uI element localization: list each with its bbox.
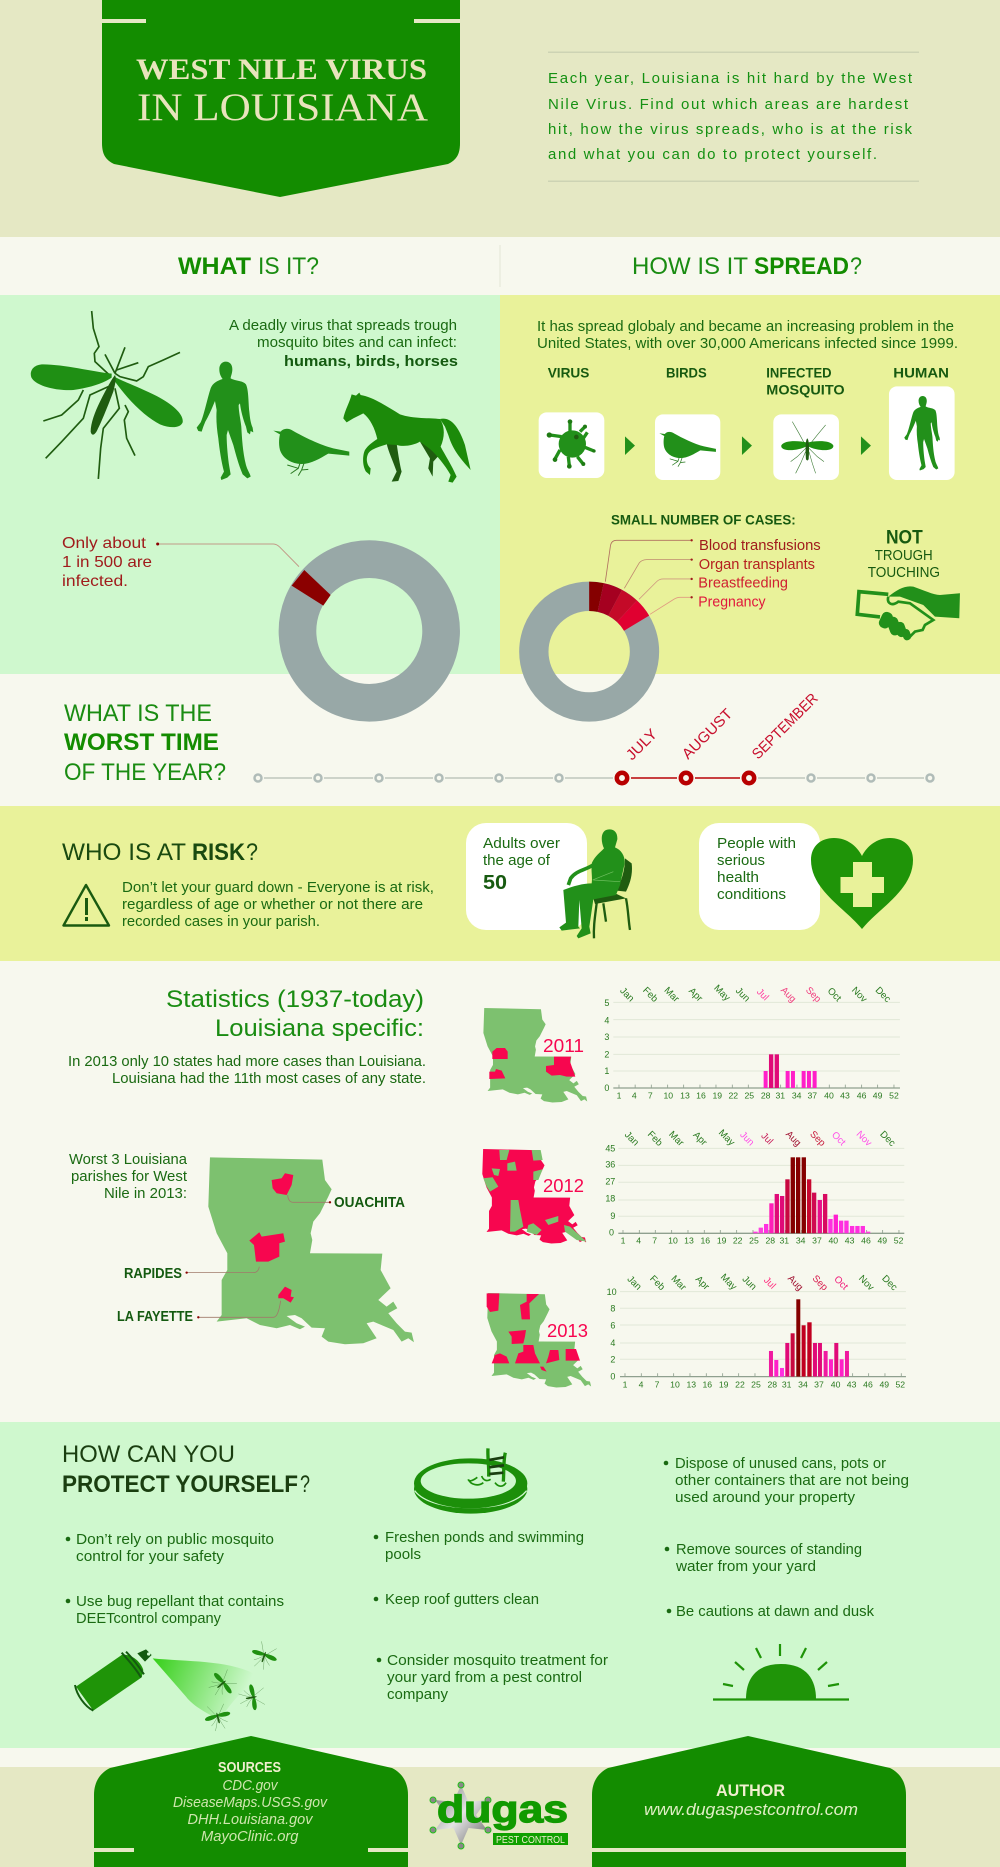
- arrow: [861, 436, 871, 455]
- statistics text: Louisiana had the 11th most cases of any state.: [112, 1070, 426, 1087]
- title: WEST NILE VIRUS: [136, 53, 427, 86]
- bar chart: 2012: 40: [828, 1235, 838, 1245]
- title banner: [102, 0, 460, 197]
- sources banner: CDC.gov: [222, 1777, 279, 1794]
- panel: how is it spread: [500, 295, 1000, 707]
- tips: column 2: [374, 1529, 608, 1703]
- tips: column 3: water from your yard: [675, 1558, 816, 1575]
- bar chart: 2011: 22: [728, 1091, 738, 1101]
- bar chart: 2012: 0: [609, 1227, 614, 1237]
- parish labels: OUACHITA: [334, 1194, 405, 1211]
- heading: worst time: [64, 700, 226, 786]
- tips: column 2: pools: [385, 1546, 421, 1563]
- bar chart: 2011: Mar: [662, 985, 682, 1005]
- panel: header: [0, 0, 1000, 237]
- bar chart: 2012: 36: [605, 1160, 615, 1170]
- arrow: [742, 436, 752, 455]
- author banner: www.dugaspestcontrol.com: [644, 1800, 858, 1819]
- bar chart: 2013: 1: [623, 1380, 628, 1390]
- map: 2011: 2011: [543, 1036, 584, 1056]
- parish labels: LA FAYETTE: [117, 1308, 193, 1325]
- bar chart: 2011: Sep: [803, 985, 823, 1005]
- legend: transmission cases: [698, 537, 821, 611]
- step labels: [548, 365, 949, 398]
- sources banner: [94, 1736, 408, 1867]
- legend: transmission cases: Breastfeeding: [698, 575, 788, 592]
- step labels: MOSQUITO: [766, 382, 845, 398]
- bar chart: 2011: 3: [604, 1032, 609, 1042]
- bar chart: 2013: 22: [735, 1380, 745, 1390]
- tips: column 3: used around your property: [675, 1489, 856, 1506]
- bar chart: 2013: 13: [686, 1380, 696, 1390]
- intro text: and what you can do to protect yourself.: [548, 146, 877, 163]
- heading: who is at risk: RISK: [192, 839, 246, 866]
- bar chart: 2011: Nov: [849, 985, 869, 1005]
- step labels: INFECTED: [766, 365, 832, 381]
- timeline: SEPTEMBER: [749, 690, 822, 763]
- heading: how is it spread: ?: [850, 253, 862, 280]
- bar chart: 2012: Jul: [758, 1131, 775, 1147]
- bar chart: 2013: Jun: [740, 1274, 758, 1293]
- card: serious health conditions: health: [717, 869, 759, 886]
- icon: rising sun: [713, 1644, 849, 1700]
- logo: dugas pest control: [430, 1782, 568, 1849]
- bar chart: 2011: Aug: [778, 985, 798, 1005]
- bar chart: 2011: 10: [663, 1091, 673, 1101]
- panel: what is it: [0, 295, 500, 703]
- bar chart: 2013: 31: [782, 1380, 792, 1390]
- tips: column 3: [664, 1455, 909, 1620]
- bar chart: 2012: 4: [636, 1235, 641, 1245]
- bar chart: 2013: 7: [655, 1380, 660, 1390]
- spread description: It has spread globaly and became an increasing problem in the: [537, 318, 954, 335]
- bar chart: 2012: 25: [749, 1235, 759, 1245]
- heading: protect yourself: [62, 1441, 310, 1498]
- timeline: [254, 690, 934, 783]
- bar chart: 2012: 49: [877, 1235, 887, 1245]
- icon: pool: [414, 1448, 527, 1514]
- bar chart: 2012: 9: [610, 1211, 615, 1221]
- bar chart: 2013: Feb: [647, 1273, 667, 1293]
- tips: column 3: Remove sources of standing: [676, 1541, 862, 1558]
- bar chart: 2011: Feb: [640, 985, 660, 1005]
- icon: human: [197, 362, 253, 480]
- bar chart: 2011: Jun: [733, 986, 752, 1004]
- bar chart: 2013: Oct: [832, 1274, 850, 1293]
- bar chart: 2013: Nov: [856, 1273, 876, 1293]
- bar chart: 2011: 16: [696, 1091, 706, 1101]
- icon: handshake: [857, 586, 960, 641]
- tips: column 2: Freshen ponds and swimming: [385, 1529, 584, 1546]
- panel: how can you protect yourself: [0, 1422, 1000, 1748]
- donut chart: 1 in 500: [156, 542, 441, 703]
- bar chart: 2011: 4: [604, 1015, 609, 1025]
- timeline: AUGUST: [679, 706, 736, 763]
- bar chart: 2012: 13: [684, 1235, 694, 1245]
- map: 2012: [482, 1149, 587, 1243]
- bar chart: 2011: Dec: [873, 985, 893, 1005]
- tips: column 1: control for your safety: [76, 1548, 225, 1565]
- bar chart: 2013: 4: [639, 1380, 644, 1390]
- card: adults over 50: Adults over: [483, 835, 560, 852]
- spread description: United States, with over 30,000 Americans infected since 1999.: [537, 335, 958, 352]
- timeline: JULY: [623, 726, 661, 764]
- title: [136, 53, 428, 129]
- bar chart: 2013: 10: [670, 1380, 680, 1390]
- bar chart: 2013: 37: [814, 1380, 824, 1390]
- callout: 1 in 500: 1 in 500 are: [62, 554, 152, 571]
- bar chart: 2013: Mar: [669, 1273, 689, 1294]
- icon: mosquito: [31, 311, 183, 479]
- bar chart: 2012: Jan: [622, 1130, 641, 1148]
- card: serious health conditions: [699, 823, 820, 930]
- heading: what is it: WHAT: [178, 253, 251, 280]
- parish labels: [117, 1194, 405, 1325]
- card: virus: [539, 412, 604, 478]
- heading: statistics: [166, 986, 424, 1042]
- bar chart: 2012: Oct: [829, 1130, 848, 1148]
- description text: [229, 317, 458, 370]
- bar chart: 2011: Jan: [617, 986, 636, 1004]
- icon: horse: [343, 393, 471, 483]
- flow diagram: virus to human: [539, 386, 955, 480]
- panel: worst time of the year: [0, 674, 1000, 806]
- bar chart: 2013: May: [718, 1272, 739, 1293]
- callout: not through touching: [868, 527, 940, 581]
- bar chart: 2012: 52: [894, 1235, 904, 1245]
- intro text: Nile Virus. Find out which areas are hardest: [548, 96, 909, 113]
- heading: protect yourself: ?: [300, 1471, 310, 1498]
- spread description: [537, 318, 958, 352]
- heading: how is it spread: SPREAD: [754, 253, 849, 280]
- icon: warning triangle: [64, 885, 109, 926]
- heading: statistics: Statistics (1937-today): [166, 986, 424, 1013]
- step labels: VIRUS: [548, 365, 589, 381]
- legend: transmission cases: Organ transplants: [699, 556, 815, 573]
- heading: statistics: Louisiana specific:: [215, 1015, 424, 1042]
- bar chart: 2013: 10: [607, 1287, 617, 1297]
- callout: 1 in 500: infected.: [62, 573, 128, 590]
- bar chart: 2011: 4: [632, 1091, 637, 1101]
- bar chart: 2013: Sep: [810, 1273, 830, 1293]
- bar chart: 2011: 31: [775, 1091, 785, 1101]
- card: serious health conditions: conditions: [717, 886, 786, 903]
- bar chart: 2011: 37: [807, 1091, 817, 1101]
- bar chart: 2013: 2: [610, 1355, 615, 1365]
- tips: column 2: company: [387, 1686, 448, 1703]
- bar chart: 2012: Jun: [737, 1130, 756, 1148]
- bar chart: 2013: 6: [610, 1320, 615, 1330]
- card: bird: [655, 414, 720, 480]
- card: infected mosquito: [773, 414, 839, 480]
- map: Louisiana parishes: [185, 1157, 414, 1344]
- step labels: HUMAN: [893, 365, 949, 381]
- heading: protect yourself: PROTECT YOURSELF: [62, 1471, 298, 1498]
- panel: statistics: [0, 961, 1000, 1422]
- bar chart: 2011: 28: [761, 1091, 771, 1101]
- bar chart: 2011: 40: [824, 1091, 834, 1101]
- bar chart: 2011: 1: [604, 1066, 609, 1076]
- icon: seated person: [559, 829, 632, 938]
- bar chart: 2012: 18: [605, 1194, 615, 1204]
- bar chart: 2012: 46: [861, 1235, 871, 1245]
- tips: column 3: Be cautions at dawn and dusk: [676, 1603, 874, 1620]
- callout: 1 in 500: [62, 535, 152, 590]
- bar chart: 2012: 1: [621, 1235, 626, 1245]
- worst parishes text: parishes for West: [71, 1168, 188, 1185]
- bar chart: 2013: 16: [702, 1380, 712, 1390]
- bar chart: 2012: Mar: [666, 1129, 686, 1149]
- tips: column 3: Dispose of unused cans, pots or: [675, 1455, 886, 1472]
- bar chart: 2012: Sep: [807, 1129, 827, 1149]
- sources banner: SOURCES: [218, 1760, 281, 1776]
- risk text: regardless of age or whether or not there are: [122, 896, 423, 913]
- bar chart: 2013: 0: [610, 1371, 615, 1381]
- parish labels: RAPIDES: [124, 1265, 182, 1282]
- statistics text: [68, 1053, 426, 1087]
- map: 2012: 2012: [543, 1176, 584, 1196]
- bar chart: 2013: Jul: [761, 1275, 778, 1291]
- bar chart: 2013: Dec: [879, 1273, 899, 1293]
- heading: worst time: OF THE YEAR?: [64, 759, 226, 786]
- bar chart: 2011: 52: [889, 1091, 899, 1101]
- bar chart: 2011: 1: [617, 1091, 622, 1101]
- bar chart: 2011: Apr: [686, 986, 705, 1005]
- icon: heart with cross: [811, 838, 913, 929]
- card: adults over 50: 50: [483, 872, 507, 894]
- bar chart: 2012: 10: [668, 1235, 678, 1245]
- heading: who is at risk: [62, 839, 258, 866]
- intro text: Each year, Louisiana is hit hard by the West: [548, 70, 913, 87]
- intro text: hit, how the virus spreads, who is at the risk: [548, 121, 912, 138]
- callout: 1 in 500: Only about: [62, 535, 147, 552]
- worst parishes text: Nile in 2013:: [104, 1185, 187, 1202]
- legend: transmission cases: Pregnancy: [698, 594, 766, 611]
- bar chart: 2011: [604, 983, 900, 1101]
- bar chart: 2012: 16: [700, 1235, 710, 1245]
- bar chart: 2011: 43: [840, 1091, 850, 1101]
- bar chart: 2013: Aug: [785, 1273, 805, 1293]
- heading: what is it: IS IT?: [258, 253, 319, 280]
- heading: how is it spread: HOW IS IT: [632, 253, 748, 280]
- sources banner: MayoClinic.org: [201, 1828, 299, 1845]
- risk text: Don’t let your guard down - Everyone is at risk,: [122, 879, 434, 896]
- bar chart: 2011: 0: [604, 1083, 609, 1093]
- bar chart: 2013: 25: [751, 1380, 761, 1390]
- bar chart: 2012: 37: [812, 1235, 822, 1245]
- description text: humans, birds, horses: [284, 353, 458, 370]
- author banner: [592, 1736, 906, 1867]
- bar chart: 2012: Apr: [691, 1130, 709, 1149]
- heading: how is it spread: [632, 253, 862, 280]
- card: adults over 50: [466, 823, 587, 930]
- bar chart: 2011: 19: [712, 1091, 722, 1101]
- tips: column 1: [66, 1531, 284, 1627]
- heading: who is at risk: WHO IS AT: [62, 839, 186, 866]
- bar chart: 2012: [605, 1128, 904, 1245]
- tips: column 1: DEETcontrol company: [76, 1610, 221, 1627]
- intro text: [548, 70, 913, 163]
- map: 2013: [487, 1293, 591, 1387]
- bar chart: 2012: 28: [765, 1235, 775, 1245]
- bar chart: 2013: Jan: [625, 1274, 643, 1293]
- step labels: BIRDS: [666, 365, 707, 381]
- bar chart: 2012: Dec: [877, 1129, 897, 1149]
- tips: column 1: Don’t rely on public mosquito: [76, 1531, 274, 1548]
- card: adults over 50: the age of: [483, 852, 551, 869]
- risk text: recorded cases in your parish.: [122, 913, 320, 930]
- logo: dugas pest control: dugas: [437, 1789, 568, 1831]
- bar chart: 2013: 52: [895, 1380, 905, 1390]
- bar chart: 2013: 4: [610, 1338, 615, 1348]
- tips: column 2: Consider mosquito treatment for: [387, 1652, 608, 1669]
- bar chart: 2011: Jul: [754, 987, 771, 1003]
- worst parishes text: [69, 1151, 188, 1202]
- heading: protect yourself: HOW CAN YOU: [62, 1441, 235, 1468]
- bar chart: 2011: 5: [604, 998, 609, 1008]
- map: 2013: 2013: [547, 1321, 588, 1341]
- tips: column 3: other containers that are not being: [675, 1472, 909, 1489]
- bar chart: 2011: 49: [873, 1091, 883, 1101]
- heading: small number of cases: SMALL NUMBER OF CASES:: [611, 511, 796, 527]
- title: IN LOUISIANA: [137, 86, 428, 129]
- callout: not through touching: TROUGH: [875, 547, 933, 564]
- tips: column 1: Use bug repellant that contains: [76, 1593, 284, 1610]
- heading: worst time: WHAT IS THE: [64, 700, 212, 727]
- bar chart: 2012: 22: [733, 1235, 743, 1245]
- heading: worst time: WORST TIME: [64, 729, 219, 756]
- icon: spray can and mosquitoes: [75, 1639, 281, 1733]
- bar chart: 2011: 7: [648, 1091, 653, 1101]
- donut chart: small number of cases: [534, 539, 693, 707]
- heading: who is at risk: ?: [246, 839, 258, 866]
- bar chart: 2012: 27: [605, 1176, 615, 1186]
- bar chart: 2013: Apr: [693, 1274, 712, 1293]
- bar chart: 2011: 13: [680, 1091, 690, 1101]
- card: serious health conditions: serious: [717, 852, 765, 869]
- card: human: [889, 386, 955, 480]
- bar chart: 2013: 34: [798, 1380, 808, 1390]
- description text: mosquito bites and can infect:: [257, 334, 457, 351]
- bar chart: 2012: 31: [779, 1235, 789, 1245]
- bar chart: 2013: 43: [847, 1380, 857, 1390]
- author banner: AUTHOR: [716, 1781, 785, 1800]
- bar chart: 2012: Aug: [783, 1129, 803, 1149]
- tips: column 2: Keep roof gutters clean: [385, 1591, 539, 1608]
- bar chart: 2013: 8: [610, 1304, 615, 1314]
- bar chart: 2013: 49: [879, 1380, 889, 1390]
- bar chart: 2013: 28: [767, 1380, 777, 1390]
- bar chart: 2011: 2: [604, 1049, 609, 1059]
- panel: footer: [0, 1736, 1000, 1867]
- bar chart: 2011: 34: [792, 1091, 802, 1101]
- panel: who is at risk: [0, 806, 1000, 961]
- bar chart: 2011: 46: [857, 1091, 867, 1101]
- bar chart: 2012: 45: [605, 1143, 615, 1153]
- bar chart: 2012: May: [716, 1128, 737, 1148]
- tips: column 2: your yard from a pest control: [387, 1669, 582, 1686]
- bar chart: 2013: 40: [831, 1380, 841, 1390]
- card: serious health conditions: People with: [717, 835, 796, 852]
- heading strip: [0, 237, 1000, 295]
- bar chart: 2011: 25: [744, 1091, 754, 1101]
- bar chart: 2012: 7: [652, 1235, 657, 1245]
- arrow: [625, 436, 635, 455]
- sources banner: DHH.Louisiana.gov: [188, 1811, 314, 1828]
- description text: A deadly virus that spreads trough: [229, 317, 457, 334]
- bar chart: 2012: 34: [796, 1235, 806, 1245]
- icon: bird: [273, 429, 349, 476]
- callout: not through touching: TOUCHING: [868, 564, 940, 581]
- bar chart: 2013: 19: [719, 1380, 729, 1390]
- callout: not through touching: NOT: [886, 527, 923, 548]
- risk text: [122, 879, 434, 930]
- bar chart: 2013: 46: [863, 1380, 873, 1390]
- bar chart: 2012: Nov: [854, 1129, 874, 1149]
- bar chart: 2012: Feb: [645, 1129, 664, 1149]
- bar chart: 2011: May: [711, 983, 732, 1004]
- bar chart: 2011: Oct: [825, 986, 843, 1004]
- heading: what is it: [178, 253, 319, 280]
- sources banner: DiseaseMaps.USGS.gov: [173, 1794, 328, 1811]
- worst parishes text: Worst 3 Louisiana: [69, 1151, 188, 1168]
- map: 2011: [483, 1008, 587, 1102]
- logo: dugas pest control: PEST CONTROL: [496, 1834, 565, 1846]
- legend: transmission cases: Blood transfusions: [699, 537, 821, 554]
- bar chart: 2012: 43: [845, 1235, 855, 1245]
- bar chart: 2012: 19: [717, 1235, 727, 1245]
- statistics text: In 2013 only 10 states had more cases than Louisiana.: [68, 1053, 426, 1070]
- bar chart: 2013: [607, 1272, 906, 1390]
